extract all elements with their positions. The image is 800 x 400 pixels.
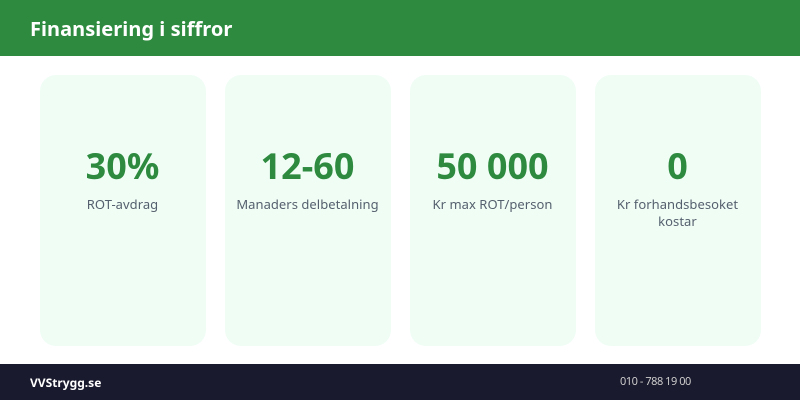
footer bar	[0, 364, 800, 400]
panel: pre-visit cost	[595, 75, 761, 346]
label: ROT-avdrag: ROT-avdrag	[87, 195, 158, 213]
stat: 30%: 30%	[86, 141, 159, 190]
brand name: VVStrygg.se	[30, 374, 101, 391]
label: Kr forhandsbesoket kostar: Kr forhandsbesoket kostar	[617, 195, 738, 230]
stat: 50 000: 50 000	[436, 141, 549, 190]
panel: instalments	[225, 75, 391, 346]
label: Manaders delbetalning: Manaders delbetalning	[236, 195, 379, 213]
stat: 0: 0	[667, 141, 688, 190]
header bar	[0, 0, 800, 56]
panel: max ROT	[410, 75, 576, 346]
label: Kr max ROT/person: Kr max ROT/person	[433, 195, 552, 213]
phone number: 010 - 788 19 00	[620, 374, 691, 389]
panel: ROT deduction	[40, 75, 206, 346]
stat: 12-60: 12-60	[261, 141, 354, 190]
title: Finansiering i siffror	[30, 15, 232, 42]
